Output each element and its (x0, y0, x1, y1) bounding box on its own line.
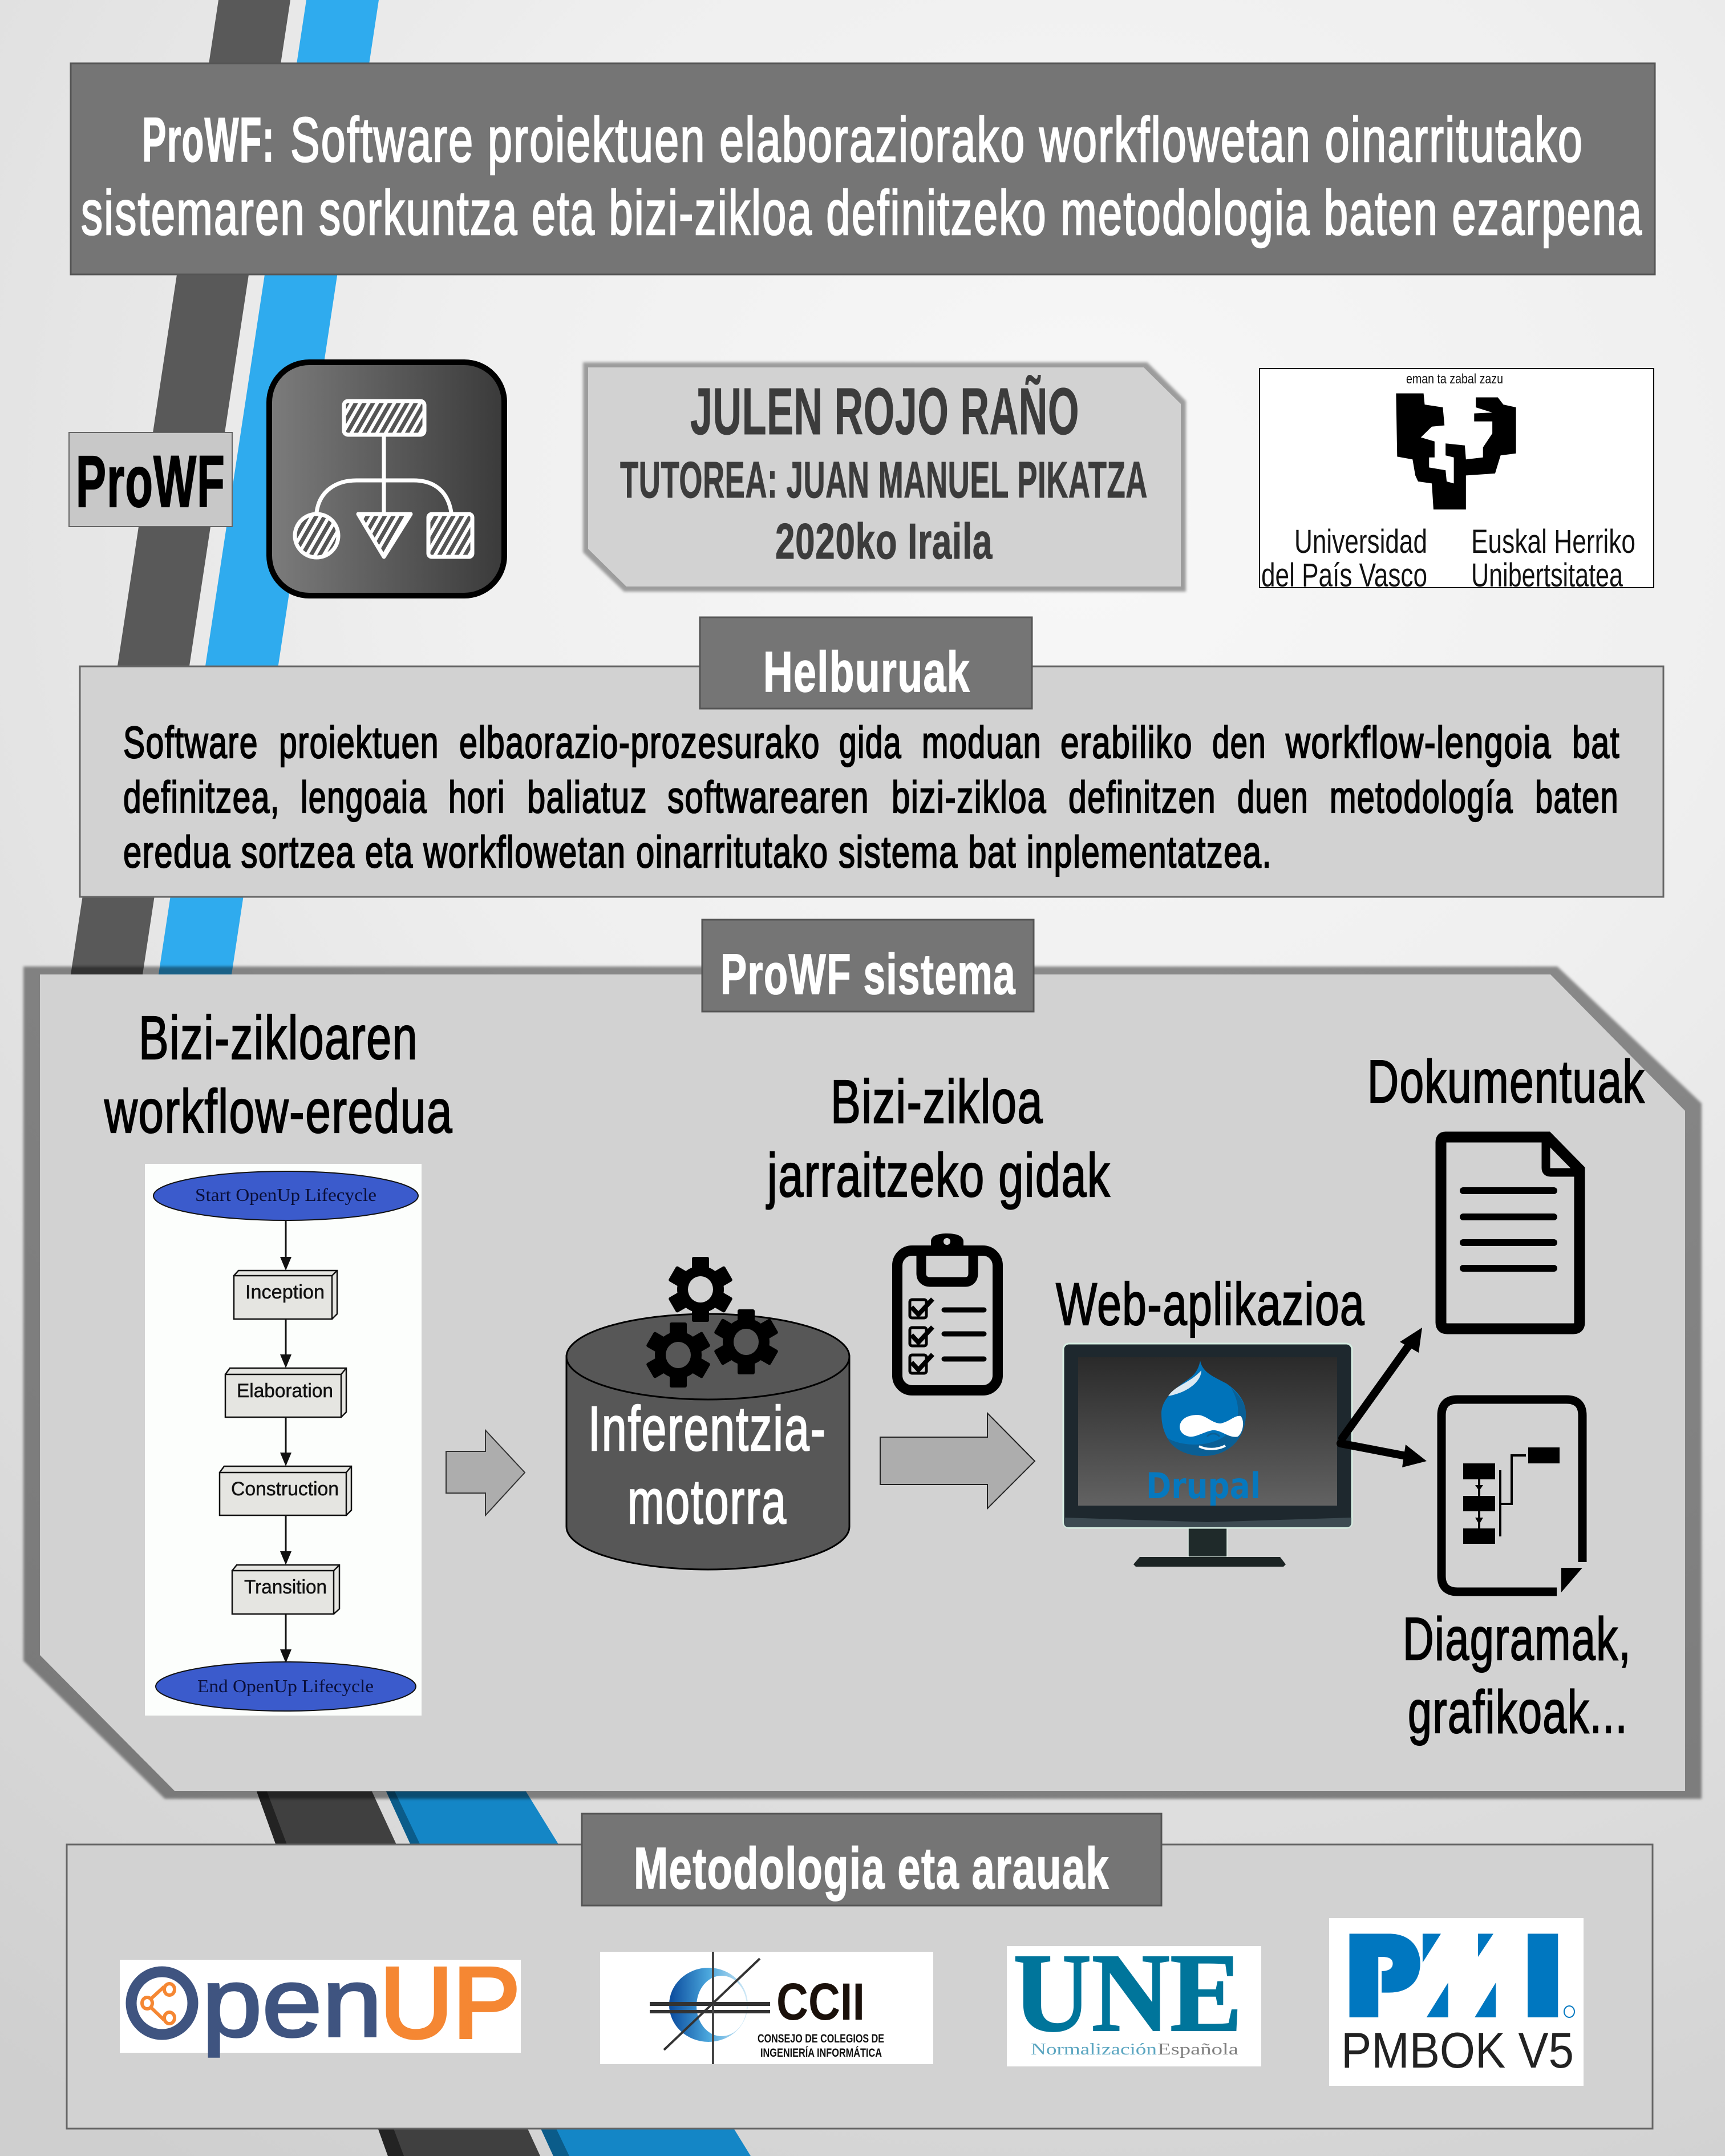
logo: UNE: UNE (1013, 1930, 1242, 2055)
text block: objectives: Software (123, 717, 258, 767)
text block: objectives: workflow-lengoia (1285, 717, 1552, 767)
text block: objectives: erabiliko (1060, 717, 1193, 767)
text block: objectives: gida (839, 717, 902, 767)
text block: objectives: elbaorazio-prozesurako (459, 717, 820, 767)
arrow: engine to web app (880, 1413, 1035, 1508)
label: diagrams: Diagramak, (1403, 1605, 1631, 1673)
logo: UPV/EHU (1260, 369, 1654, 594)
heading: ProWF sistema (702, 920, 1034, 1012)
logo: CCII: INGENIERÍA INFORMÁTICA (760, 2046, 882, 2060)
heading: Helburuak: Helburuak (763, 640, 970, 704)
heading: Helburuak (700, 617, 1032, 709)
icon: ProWF workflow logo (269, 362, 504, 596)
chart: OpenUP lifecycle flowchart: Inception (245, 1281, 325, 1303)
text block: objectives: definitzea, (123, 772, 280, 822)
logo: UPV/EHU: del País Vasco (1261, 557, 1427, 594)
text block: objectives: baliatuz (527, 772, 647, 822)
logo: PMI PMBOK V5 (1329, 1918, 1584, 2086)
logo: OpenUP: UP (380, 1947, 520, 2059)
text block: objectives: bat (1572, 717, 1620, 767)
label: workflow model: workflow-eredua (104, 1077, 453, 1146)
logo: CCII: CCII (776, 1973, 865, 2031)
panel: Helburuak (80, 617, 1663, 897)
logo: UPV/EHU: eman ta zabal zazu (1406, 371, 1503, 387)
label: diagrams: grafikoak... (1408, 1678, 1628, 1746)
text block: objectives: moduan (922, 717, 1042, 767)
text block: objectives: metodología (1330, 772, 1513, 822)
text block: objectives: hori (448, 772, 505, 822)
logo: UNE: Normalización (1031, 2040, 1157, 2058)
chart: OpenUP lifecycle flowchart: Start OpenUp Lifecycle (195, 1184, 376, 1205)
label: guides: jarraitzeko gidak (766, 1140, 1111, 1210)
logo: CCII (600, 1952, 933, 2064)
text block: objectives: den (1212, 717, 1266, 767)
icon: Drupal drop (1161, 1361, 1246, 1456)
text block: objectives: bizi-zikloa (892, 772, 1047, 822)
icon: clipboard checklist (897, 1233, 998, 1390)
label: diagrams (1403, 1605, 1631, 1746)
chart: OpenUP lifecycle flowchart: Construction (231, 1478, 339, 1500)
icon: monitor with Drupal: Drupal (1146, 1465, 1261, 1507)
logo: PMI PMBOK V5: PMBOK V5 (1341, 2022, 1574, 2078)
panel: ProWF sistema (23, 920, 1702, 1799)
logo: OpenUP: pen (202, 1948, 382, 2057)
heading: ProWF sistema: ProWF sistema (720, 943, 1016, 1006)
text block: objectives: definitzen (1068, 772, 1216, 822)
logo: OpenUP (120, 1947, 521, 2059)
text block: objectives: eredua sortzea eta workflowetan oinarritutako sistema bat inplementatzea. (123, 827, 1272, 877)
arrow: web app to documents (1342, 1328, 1422, 1438)
text block: objectives: baten (1535, 772, 1619, 822)
panel: Metodologia eta arauak (67, 1814, 1653, 2129)
chart: OpenUP lifecycle flowchart: Transition (244, 1576, 327, 1598)
icon: diagram sheet (1441, 1399, 1582, 1592)
arrow: web app to diagrams (1341, 1443, 1427, 1467)
title banner (71, 63, 1655, 274)
logo: CCII: CONSEJO DE COLEGIOS DE (758, 2032, 884, 2045)
text block: objectives: lengoaia (301, 772, 427, 822)
icon: gears (646, 1257, 779, 1388)
label: workflow model (104, 1003, 453, 1146)
panel: author: TUTOREA: JUAN MANUEL PIKATZA (620, 452, 1148, 509)
chart: OpenUP lifecycle flowchart: End OpenUp Lifecycle (197, 1676, 374, 1696)
chart: OpenUP lifecycle flowchart: Elaboration (237, 1380, 333, 1402)
logo: UPV/EHU: Euskal Herriko (1471, 523, 1635, 560)
label: guides (766, 1067, 1111, 1210)
logo: UPV/EHU: Universidad (1294, 523, 1427, 560)
panel: author: JULEN ROJO RAÑO (690, 374, 1079, 448)
label: web application: Web-aplikazioa (1056, 1271, 1365, 1338)
text block: objectives: softwarearen (667, 772, 869, 822)
icon: document (1441, 1137, 1581, 1329)
text block: objectives (123, 717, 1620, 877)
icon: inference engine cylinder: motorra (627, 1467, 787, 1537)
icon: monitor with Drupal (1063, 1344, 1352, 1567)
arrow: flowchart to engine (446, 1430, 525, 1515)
heading: Metodologia eta arauak (582, 1814, 1161, 1906)
ProWF label: ProWF (76, 441, 225, 523)
label: workflow model: Bizi-zikloaren (139, 1003, 418, 1072)
chart: OpenUP lifecycle flowchart (145, 1164, 422, 1716)
text block: objectives: duen (1237, 772, 1309, 822)
label: guides: Bizi-zikloa (831, 1067, 1043, 1136)
panel: author: 2020ko Iraila (775, 513, 993, 569)
ProWF label (69, 432, 232, 527)
icon: inference engine cylinder (566, 1257, 849, 1570)
text block: objectives: proiektuen (279, 717, 439, 767)
title banner: ProWF: (142, 105, 275, 175)
background stripes (71, 0, 751, 2156)
panel: author (583, 362, 1186, 592)
heading: Metodologia eta arauak: Metodologia eta arauak (634, 1835, 1109, 1901)
logo: UPV/EHU: Unibertsitatea (1471, 557, 1623, 594)
icon: inference engine cylinder: Inferentzia- (588, 1394, 827, 1464)
logo: UNE: Española (1157, 2040, 1238, 2058)
